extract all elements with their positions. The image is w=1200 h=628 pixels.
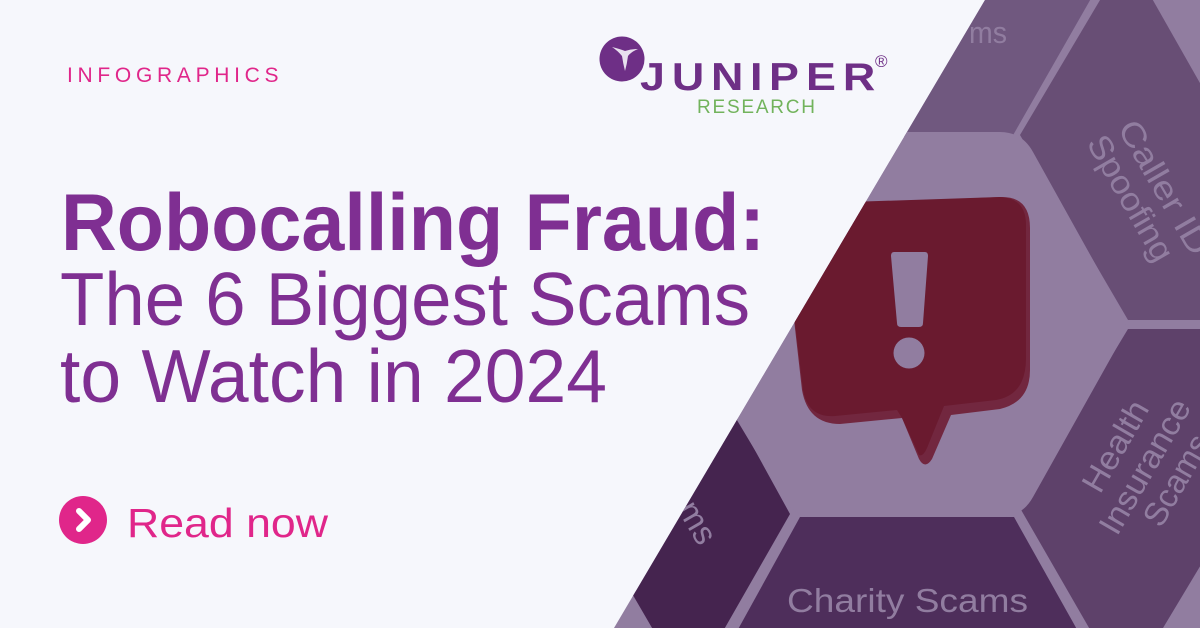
label: charity scams: Charity Scams (787, 583, 1028, 620)
title line 1: Robocalling Fraud: (61, 178, 765, 268)
icon: exclamation mark (891, 252, 928, 368)
category label: INFOGRAPHICS (67, 64, 283, 87)
segment: lower-left scams (633, 419, 790, 628)
logo wordmark: JUNIPER (640, 55, 875, 98)
label: top segment text: ms (969, 15, 1007, 50)
logo subtitle: RESEARCH (697, 97, 815, 118)
label: caller ID spoofing: Spoofing (1080, 128, 1182, 268)
segment: charity scams (736, 517, 1079, 628)
title line 3: to Watch in 2024 (60, 334, 607, 418)
label: health insurance scams: Insurance (1091, 392, 1198, 540)
title (60, 178, 765, 418)
registered mark: ® (875, 52, 888, 71)
call to action: read now (59, 496, 328, 546)
label: health insurance scams: Health (1074, 393, 1156, 498)
icon: alert speech bubble (785, 197, 1030, 464)
hexagon: central (737, 132, 1116, 510)
segment: caller ID spoofing (1020, 0, 1200, 320)
label: lower-left text: ms (671, 494, 725, 551)
logo mark (600, 36, 644, 82)
link text: Read now (127, 500, 328, 546)
segment: top scams (904, 0, 1090, 137)
segment: health insurance scams (1020, 329, 1200, 628)
panel: hexagon graphic (600, 0, 1200, 628)
icon: arrow button (59, 496, 107, 544)
logo: Juniper Research (600, 36, 888, 118)
label: caller ID spoofing (1090, 122, 1200, 264)
title line 2: The 6 Biggest Scams (60, 257, 750, 341)
